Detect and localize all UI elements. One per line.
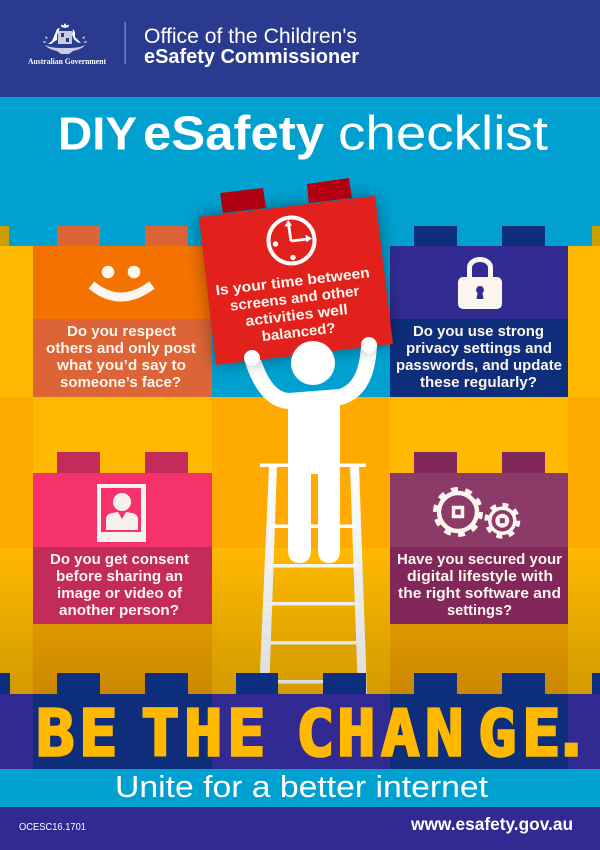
question text: another person?	[59, 603, 179, 619]
question text: activities well	[245, 302, 349, 330]
sky background	[0, 97, 600, 397]
Australian Government logo	[28, 23, 106, 66]
icon: clock	[268, 218, 314, 264]
question text: Do you get consent	[50, 552, 189, 568]
panel: balance brick	[199, 178, 393, 365]
brick studs	[57, 226, 188, 246]
question text: Do you respect	[67, 324, 176, 340]
base row of studs	[0, 673, 600, 695]
question text: others and only post	[46, 341, 196, 357]
slogan: be the change: BE THE CHANGE.	[36, 698, 591, 772]
question text: before sharing an	[56, 569, 183, 585]
title: DIY	[58, 108, 137, 160]
organisation name: eSafety Commissioner	[144, 45, 359, 68]
publication code: OCESC16.1701	[19, 822, 86, 833]
organisation name	[144, 25, 359, 68]
organisation name: Office of the Children's	[144, 25, 357, 48]
brick studs	[57, 452, 188, 473]
question text: the right software and	[398, 586, 561, 602]
title: eSafety	[143, 108, 324, 160]
ladder	[259, 464, 367, 694]
hands	[244, 337, 377, 366]
icon: gears	[435, 489, 518, 537]
question text: digital lifestyle with	[407, 569, 553, 585]
brick wall	[0, 226, 600, 698]
question text: Do you use strong	[413, 324, 544, 340]
icon: coat of arms	[43, 23, 87, 54]
panel: respect brick	[33, 226, 212, 397]
question text: these regularly?	[420, 375, 537, 391]
panel: consent brick	[33, 452, 212, 624]
footer	[0, 807, 600, 850]
footer brick band	[0, 694, 600, 770]
question text: Have you secured your	[397, 552, 562, 568]
icon: portrait photo	[97, 484, 146, 542]
question text: passwords, and update	[396, 358, 562, 374]
question text	[215, 265, 377, 350]
tagline band	[0, 769, 600, 807]
question text: someone’s face?	[60, 375, 181, 391]
question text: balanced?	[261, 321, 337, 345]
question text: screens and other	[229, 284, 361, 315]
person	[252, 345, 369, 563]
head	[291, 341, 335, 385]
panel: software brick	[390, 452, 568, 624]
question text: what you’d say to	[56, 358, 186, 374]
question text: image or video of	[57, 586, 182, 602]
question text: settings?	[447, 603, 512, 619]
question text: privacy settings and	[406, 341, 552, 357]
tagline: Unite for a better internet	[115, 769, 488, 804]
red brick shadow	[199, 196, 393, 365]
question text	[50, 552, 189, 619]
website url: www.esafety.gov.au	[410, 814, 573, 834]
title	[58, 108, 548, 160]
question text	[397, 552, 562, 619]
brick studs	[220, 178, 352, 213]
question text: Is your time between	[215, 265, 371, 299]
header band	[0, 0, 600, 97]
question text	[396, 324, 562, 391]
icon: smiley face	[92, 266, 152, 297]
person's head and hands	[199, 178, 393, 385]
brick studs	[414, 452, 545, 473]
panel: privacy brick	[390, 226, 568, 397]
title: checklist	[338, 108, 548, 160]
question text	[46, 324, 196, 391]
logo wordmark: Australian Government	[28, 56, 106, 66]
icon: padlock	[458, 260, 502, 309]
brick studs	[414, 226, 545, 246]
